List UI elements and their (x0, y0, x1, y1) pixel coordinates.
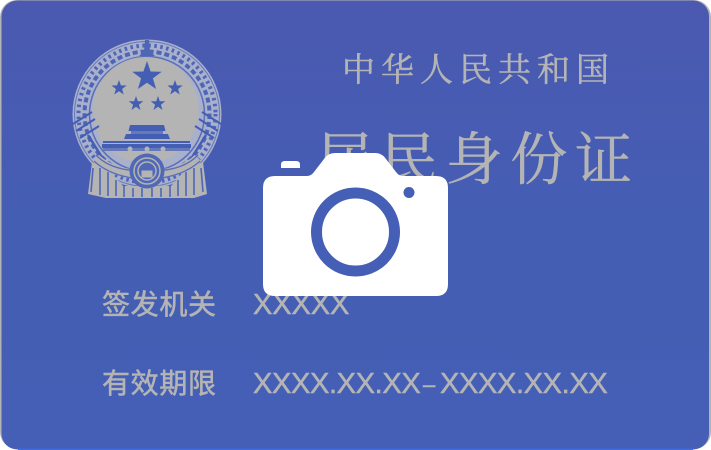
camera body (263, 153, 448, 296)
emblem wheat stalk (139, 40, 155, 56)
heading: country name: 中华人民共和国 (342, 52, 609, 89)
camera shutter button (281, 161, 300, 168)
value: issuing authority: XXXXX (253, 289, 349, 321)
value: validity period: – (423, 372, 436, 397)
icon: camera (263, 153, 448, 296)
emblem centre disc (92, 57, 198, 163)
emblem gear (130, 154, 164, 188)
emblem Tiananmen gate (102, 125, 191, 152)
icon: national emblem (72, 40, 222, 198)
emblem stars (111, 61, 183, 110)
emblem wreath (72, 40, 222, 188)
value: validity period: XXXX.XX.XX (440, 368, 607, 400)
emblem hanging ribbons (88, 155, 207, 198)
label: validity period: 有效期限 (102, 368, 216, 399)
heading: document name: 居民身份证 (316, 129, 632, 192)
camera lens (316, 193, 394, 271)
camera flash (404, 187, 414, 198)
value: validity period: XXXX.XX.XX (253, 368, 420, 400)
label: issuing authority: 签发机关 (102, 289, 216, 320)
emblem side bands (73, 112, 221, 159)
